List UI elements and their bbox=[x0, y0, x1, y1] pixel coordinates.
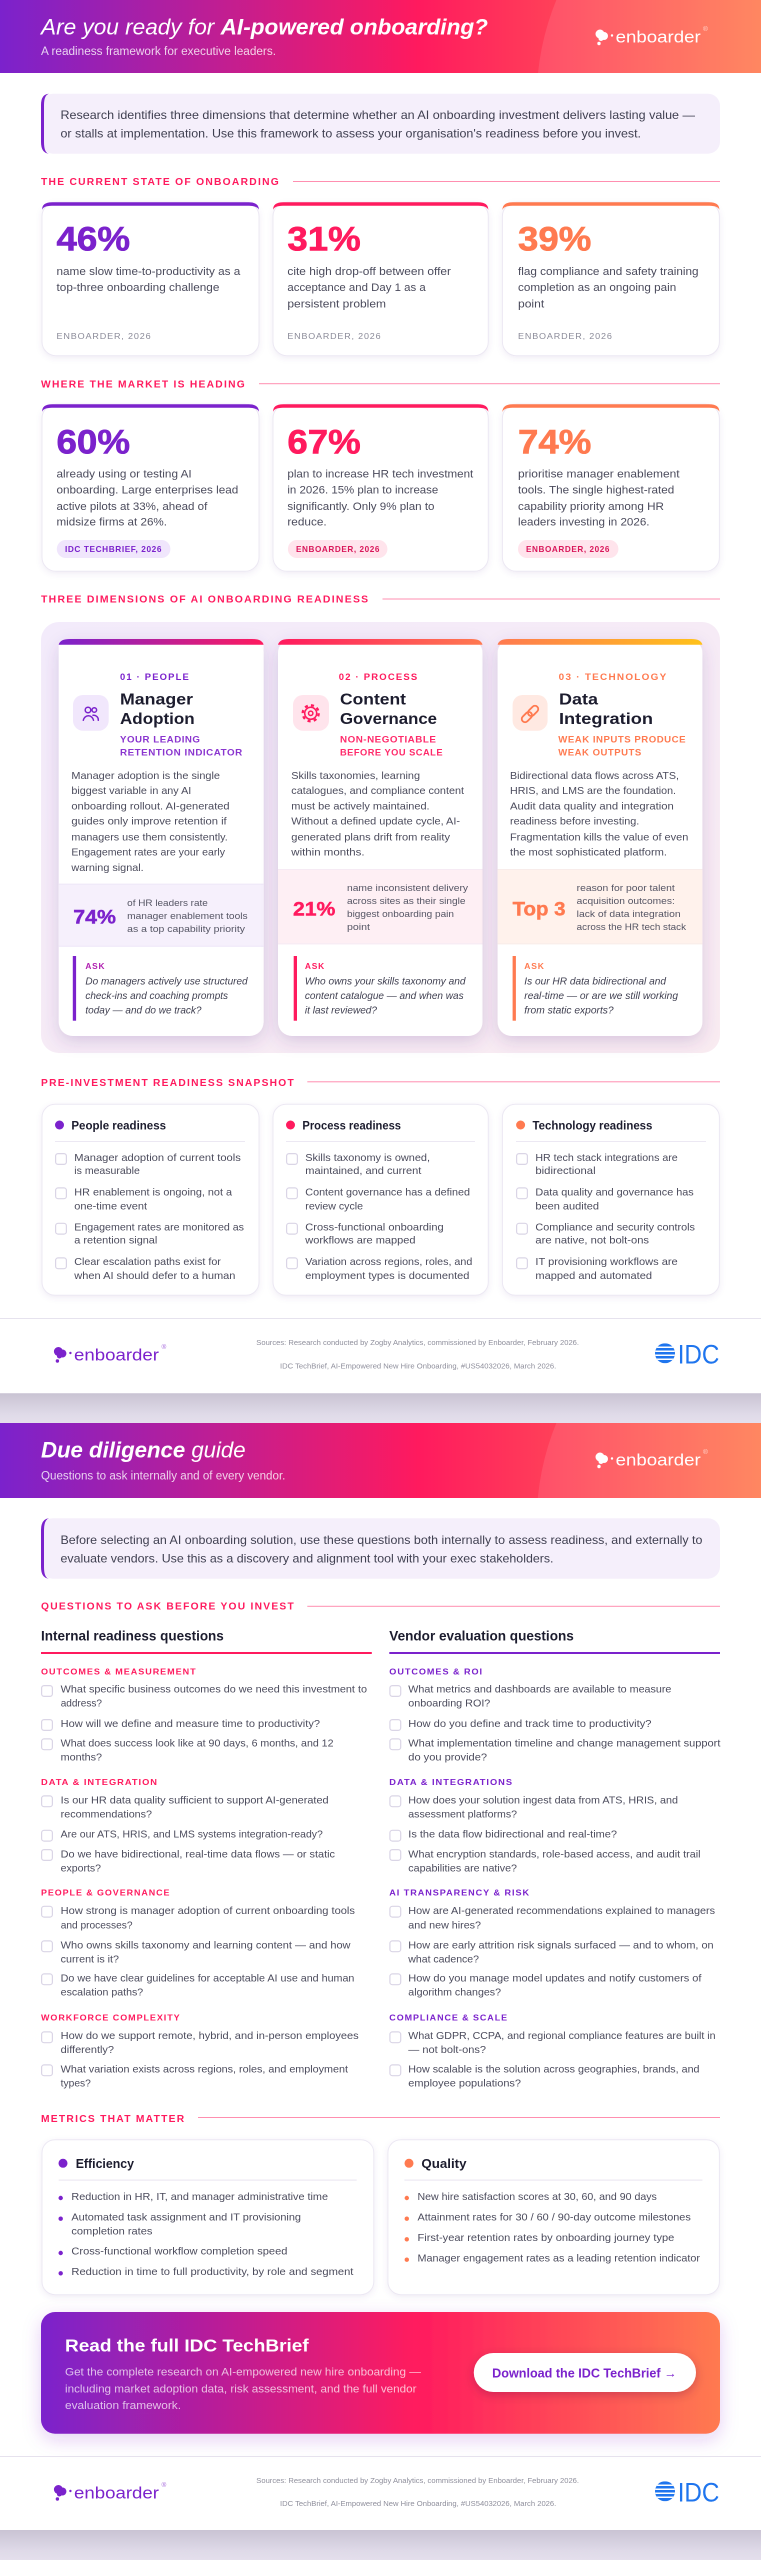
checklist card: technology readiness: bidirectional bbox=[535, 1166, 596, 1177]
group: AI transparency and risk: AI TRANSPARENCY & RISK bbox=[389, 1888, 530, 1898]
stat card: 60%: active pilots at 33%, ahead of bbox=[56, 501, 207, 513]
group: data and integrations: capabilities are native? bbox=[408, 1863, 517, 1874]
stat card: 31%: persistent problem bbox=[287, 298, 386, 310]
stat card: 39%: point bbox=[518, 298, 544, 310]
stat card: 39%: completion as an ongoing pain bbox=[518, 282, 676, 294]
group: outcomes and ROI: OUTCOMES & ROI bbox=[389, 1666, 483, 1676]
card: technology: Data bbox=[559, 692, 598, 708]
stat card: 60%: already using or testing AI bbox=[56, 468, 192, 480]
group: AI transparency and risk: what cadence? bbox=[407, 1954, 479, 1965]
metrics card: efficiency: Efficiency bbox=[76, 2157, 134, 2171]
logo: enboarder white: ® bbox=[703, 1448, 708, 1456]
group: data and integrations: What encryption standards, role-based access, and audit trail bbox=[408, 1849, 700, 1860]
group: outcomes and measurement: OUTCOMES & MEASUREMENT bbox=[41, 1666, 197, 1676]
metrics card: quality: Attainment rates for 30 / 60 / 90-day outcome milestones bbox=[418, 2212, 691, 2223]
body text: catalogues, and compliance content bbox=[291, 786, 464, 797]
checklist card: people readiness: People readiness bbox=[71, 1120, 166, 1132]
stat card: 67%: reduce. bbox=[287, 516, 327, 528]
group: people and governance: and processes? bbox=[61, 1921, 133, 1932]
stat card: 67%: significantly. Only 9% plan to bbox=[287, 501, 435, 513]
body text: HRIS, and LMS are the foundation. bbox=[510, 786, 676, 797]
group: data and integrations: assessment platforms? bbox=[408, 1809, 517, 1820]
button: Download the IDC TechBrief → bbox=[492, 2366, 677, 2380]
sources bbox=[256, 2476, 579, 2508]
stat card: 74%: leaders investing in 2026. bbox=[518, 516, 650, 528]
body text: guides only improve retention if bbox=[71, 816, 227, 827]
checklist card: technology readiness: are native, not bolt-ons bbox=[535, 1236, 649, 1247]
group: people and governance: How strong is manager adoption of current onboarding tools bbox=[61, 1906, 355, 1917]
metrics card: efficiency: Automated task assignment and IT provisioning bbox=[71, 2212, 301, 2223]
group: outcomes and measurement: address? bbox=[61, 1699, 102, 1710]
card: people: Adoption bbox=[120, 711, 195, 728]
sources: IDC TechBrief, AI-Empowered New Hire Onboarding, #US54032026, March 2026. bbox=[280, 2499, 556, 2508]
checklist card: technology readiness: IT provisioning workflows are bbox=[535, 1257, 678, 1268]
checklist card: technology readiness: Technology readiness bbox=[532, 1120, 652, 1132]
group: data and integration bbox=[41, 1777, 335, 1874]
intro callout: due diligence: Before selecting an AI onboarding solution, use these questions both internally to assess readiness, and externally to bbox=[60, 1533, 703, 1547]
group: workforce complexity: differently? bbox=[61, 2045, 114, 2056]
stat card: 60%: 60% bbox=[56, 423, 130, 461]
section heading: three dimensions: THREE DIMENSIONS OF AI ONBOARDING READINESS bbox=[41, 593, 369, 605]
checklist card: people readiness bbox=[42, 1104, 259, 1295]
header: page 2 bbox=[0, 1423, 761, 1498]
logo: enboarder purple bbox=[54, 1343, 166, 1365]
card: process: NON-NEGOTIABLE bbox=[340, 734, 436, 745]
group: outcomes and ROI: What implementation timeline and change management support bbox=[408, 1739, 721, 1750]
intro callout: Research identifies three dimensions that determine whether an AI onboarding investment delivers lasting value — bbox=[60, 108, 695, 122]
stat band: 21% bbox=[278, 869, 482, 944]
gap shadow between pages bbox=[0, 1393, 761, 1423]
stat band: Top 3: across the HR tech stack bbox=[577, 922, 686, 932]
logo: IDC bbox=[655, 1343, 718, 1364]
checklist card: people readiness: a retention signal bbox=[74, 1236, 157, 1247]
call to action banner bbox=[41, 2312, 720, 2434]
stat band: 21%: point bbox=[347, 922, 370, 932]
column: internal readiness questions: Internal readiness questions bbox=[41, 1629, 224, 1644]
logo: enboarder white bbox=[596, 25, 708, 47]
metrics card: quality: First-year retention rates by onboarding journey type bbox=[418, 2233, 675, 2244]
logo: enboarder white: ® bbox=[703, 25, 708, 33]
stat band: 21%: 21% bbox=[293, 899, 336, 920]
ask question: Who owns your skills taxonomy and bbox=[305, 977, 466, 988]
call to action banner: including market adoption data, risk assessment, and the full vendor bbox=[65, 2383, 417, 2395]
bottom shadow bbox=[0, 2530, 761, 2560]
stat band: 74%: manager enablement tools bbox=[127, 911, 248, 921]
card: people: 01 · PEOPLE bbox=[120, 672, 190, 683]
stat card: 74%: capability priority among HR bbox=[518, 501, 664, 513]
group: outcomes and ROI bbox=[389, 1666, 721, 1764]
stat card: 67%: plan to increase HR tech investment bbox=[287, 468, 473, 480]
metrics card: efficiency: Reduction in HR, IT, and manager administrative time bbox=[71, 2192, 328, 2203]
card: process: BEFORE YOU SCALE bbox=[340, 748, 443, 759]
body text: Bidirectional data flows across ATS, bbox=[510, 771, 679, 782]
group: compliance and scale: COMPLIANCE & SCALE bbox=[389, 2013, 508, 2023]
logo: enboarder purple: ® bbox=[162, 1343, 166, 1351]
checklist card: process readiness: Process readiness bbox=[302, 1120, 401, 1132]
stat band: Top 3 bbox=[498, 869, 702, 944]
card: technology: Integration bbox=[559, 711, 653, 728]
body text bbox=[70, 771, 230, 874]
section heading: metrics: METRICS THAT MATTER bbox=[41, 2113, 185, 2125]
group: workforce complexity: WORKFORCE COMPLEXITY bbox=[41, 2013, 181, 2023]
footer: page 2 bbox=[0, 2456, 761, 2508]
group: outcomes and measurement: months? bbox=[61, 1753, 102, 1764]
call to action banner: Read the full IDC TechBrief bbox=[65, 2336, 309, 2356]
section heading: current state: THE CURRENT STATE OF ONBOARDING bbox=[41, 176, 280, 188]
ask question: it last reviewed? bbox=[305, 1005, 377, 1016]
metrics card: quality: Manager engagement rates as a leading retention indicator bbox=[418, 2253, 701, 2264]
ask question: content catalogue — and when was bbox=[305, 991, 464, 1002]
icon: link bbox=[513, 695, 548, 731]
logo: enboarder purple: enboarder bbox=[74, 2484, 160, 2502]
stat card: 39%: ENBOARDER, 2026 bbox=[518, 331, 613, 341]
stat card: 46%: name slow time-to-productivity as a bbox=[56, 266, 240, 278]
sources: IDC TechBrief, AI-Empowered New Hire Onboarding, #US54032026, March 2026. bbox=[280, 1361, 556, 1370]
ask question: ASK bbox=[524, 961, 545, 971]
card: process: 02 · PROCESS bbox=[339, 672, 418, 683]
column: internal readiness questions bbox=[41, 1629, 372, 2090]
stat band: Top 3: acquisition outcomes: bbox=[577, 896, 675, 906]
body text: generated plans drift from reality bbox=[291, 832, 451, 843]
sources bbox=[256, 1338, 579, 1370]
body text: must be actively maintained. bbox=[291, 802, 430, 813]
group: outcomes and measurement bbox=[41, 1666, 367, 1764]
ask question bbox=[513, 956, 678, 1021]
group: data and integration: Are our ATS, HRIS, and LMS systems integration-ready? bbox=[61, 1830, 323, 1841]
intro callout: due diligence: evaluate vendors. Use this as a discovery and alignment tool with your exec stakeholders. bbox=[60, 1551, 554, 1565]
stat card: 60%: midsize firms at 26%. bbox=[56, 516, 167, 528]
stat card: 46%: top-three onboarding challenge bbox=[56, 282, 220, 294]
card: people: RETENTION INDICATOR bbox=[120, 748, 243, 759]
checklist card: technology readiness bbox=[502, 1104, 719, 1295]
ask question: Is our HR data bidirectional and bbox=[524, 977, 666, 988]
group: data and integrations: DATA & INTEGRATIONS bbox=[389, 1777, 513, 1787]
icon: gear bbox=[293, 695, 329, 731]
group: AI transparency and risk: How are early attrition risk signals surfaced — and to whom, on bbox=[408, 1940, 714, 1951]
group: data and integration: DATA & INTEGRATION bbox=[41, 1777, 158, 1787]
ask question: ASK bbox=[85, 961, 105, 971]
logo: IDC bbox=[655, 2481, 718, 2502]
ask question: check-ins and coaching prompts bbox=[85, 991, 228, 1002]
group: outcomes and ROI: What metrics and dashboards are available to measure bbox=[408, 1685, 672, 1696]
checklist card: people readiness: Engagement rates are monitored as bbox=[74, 1223, 244, 1234]
metrics card: efficiency: completion rates bbox=[71, 2226, 152, 2237]
stat band: 74%: as a top capability priority bbox=[127, 924, 245, 934]
group: outcomes and measurement: How will we define and measure time to productivity? bbox=[61, 1719, 320, 1730]
stat card: 31% bbox=[273, 202, 488, 356]
stat card: 67%: in 2026. 15% plan to increase bbox=[287, 484, 438, 496]
group: people and governance bbox=[41, 1888, 355, 1999]
section heading: market: WHERE THE MARKET IS HEADING bbox=[41, 378, 246, 390]
sources: Sources: Research conducted by Zogby Analytics, commissioned by Enboarder, February 2026. bbox=[256, 1338, 579, 1347]
intro callout: or stalls at implementation. Use this framework to assess your organisation's readiness before you invest. bbox=[60, 126, 641, 140]
stat card: 74%: tools. The single highest-rated bbox=[518, 484, 674, 496]
body text: managers use them consistently. bbox=[71, 832, 228, 843]
stat card: 39%: flag compliance and safety training bbox=[518, 266, 699, 278]
stat card: 46% bbox=[42, 202, 259, 356]
header: page 1 bbox=[0, 0, 761, 73]
card: technology bbox=[498, 639, 702, 1036]
checklist card: process readiness: maintained, and current bbox=[305, 1166, 422, 1177]
ask question: real-time — or are we still working bbox=[524, 991, 678, 1002]
group: AI transparency and risk: How do you manage model updates and notify customers of bbox=[408, 1974, 702, 1985]
body text bbox=[290, 771, 464, 858]
group: compliance and scale bbox=[389, 2013, 716, 2090]
stat card: 39% bbox=[502, 202, 719, 356]
checklist card: technology readiness: Compliance and security controls bbox=[535, 1223, 695, 1234]
body text: onboarding rollout. AI-generated bbox=[71, 802, 230, 813]
logo: enboarder purple: enboarder bbox=[74, 1347, 160, 1365]
checklist card: process readiness: employment types is documented bbox=[305, 1271, 470, 1282]
sources: Sources: Research conducted by Zogby Analytics, commissioned by Enboarder, February 2026. bbox=[256, 2476, 579, 2485]
intro callout: due diligence bbox=[41, 1518, 720, 1579]
call to action banner: evaluation framework. bbox=[65, 2400, 181, 2412]
body text: warning signal. bbox=[70, 863, 144, 874]
stat card: 31%: acceptance and Day 1 as a bbox=[287, 282, 426, 294]
card: process: Content bbox=[340, 692, 407, 708]
metrics card: quality bbox=[388, 2140, 719, 2295]
title: Due diligence guide bbox=[41, 1438, 246, 1463]
metrics card: efficiency: Reduction in time to full productivity, by role and segment bbox=[71, 2267, 354, 2278]
metrics card: efficiency bbox=[42, 2140, 374, 2295]
checklist card: people readiness: is measurable bbox=[74, 1166, 140, 1177]
stat card: 74% bbox=[502, 404, 719, 571]
group: people and governance: Who owns skills taxonomy and learning content — and how bbox=[61, 1940, 351, 1951]
title: Are you ready for AI-powered onboarding? bbox=[39, 14, 488, 40]
stat band: Top 3: Top 3 bbox=[513, 899, 566, 920]
group: AI transparency and risk: How are AI-generated recommendations explained to managers bbox=[408, 1906, 715, 1917]
checklist card: people readiness: one-time event bbox=[74, 1201, 147, 1212]
group: workforce complexity: types? bbox=[61, 2079, 91, 2090]
logo: enboarder purple bbox=[54, 2481, 166, 2502]
body text: Audit data quality and integration bbox=[510, 802, 674, 813]
group: workforce complexity bbox=[41, 2013, 359, 2090]
ask question: ASK bbox=[305, 961, 325, 971]
group: people and governance: current is it? bbox=[61, 1954, 119, 1965]
card: people: YOUR LEADING bbox=[120, 734, 200, 745]
checklist card: process readiness bbox=[273, 1104, 488, 1295]
stat card: 60% bbox=[42, 404, 259, 571]
ask question: from static exports? bbox=[524, 1005, 614, 1016]
body text: readiness before investing. bbox=[510, 816, 639, 827]
source pill: ENBOARDER, 2026 bbox=[526, 544, 610, 554]
body text: Fragmentation kills the value of even bbox=[510, 832, 688, 843]
logo: enboarder white bbox=[596, 1448, 708, 1470]
source pill: ENBOARDER, 2026 bbox=[296, 544, 380, 554]
card: technology: 03 · TECHNOLOGY bbox=[559, 672, 668, 683]
card: people: Manager bbox=[120, 692, 193, 708]
stat band: 21%: name inconsistent delivery bbox=[347, 883, 468, 893]
stat card: 31%: 31% bbox=[287, 221, 361, 259]
stat card: 39%: 39% bbox=[518, 221, 591, 259]
checklist card: process readiness: Cross-functional onboarding bbox=[305, 1223, 444, 1234]
ask question: today — and do we track? bbox=[85, 1005, 202, 1016]
group: outcomes and measurement: What does success look like at 90 days, 6 months, and 12 bbox=[61, 1739, 334, 1750]
body text: Without a defined update cycle, AI- bbox=[291, 816, 460, 827]
section heading: snapshot: PRE-INVESTMENT READINESS SNAPSHOT bbox=[41, 1077, 295, 1089]
stat card: 46%: ENBOARDER, 2026 bbox=[56, 331, 152, 341]
group: outcomes and measurement: What specific business outcomes do we need this investment to bbox=[61, 1685, 367, 1696]
body text bbox=[510, 771, 688, 858]
footer: page 1 bbox=[0, 1318, 761, 1370]
card: technology: WEAK OUTPUTS bbox=[558, 748, 642, 759]
logo: IDC: IDC bbox=[678, 1340, 719, 1370]
source pill bbox=[57, 540, 170, 558]
body text: Engagement rates are your early bbox=[71, 847, 226, 858]
checklist card: process readiness: Variation across regions, roles, and bbox=[305, 1257, 473, 1268]
call to action banner: Get the complete research on AI-empowered new hire onboarding — bbox=[65, 2367, 421, 2379]
stat card: 31%: cite high drop-off between offer bbox=[287, 266, 452, 278]
column: vendor evaluation questions: Vendor evaluation questions bbox=[389, 1629, 574, 1644]
group: data and integrations: Is the data flow bidirectional and real-time? bbox=[408, 1830, 617, 1841]
group: AI transparency and risk: and new hires? bbox=[408, 1921, 481, 1932]
group: outcomes and ROI: How do you define and track time to productivity? bbox=[408, 1719, 652, 1730]
checklist card: people readiness: Clear escalation paths exist for bbox=[74, 1257, 222, 1268]
stat band: 74%: of HR leaders rate bbox=[127, 898, 208, 908]
checklist card: process readiness: Skills taxonomy is owned, bbox=[305, 1153, 430, 1164]
group: compliance and scale: — not bolt-ons? bbox=[408, 2045, 486, 2056]
group: people and governance: escalation paths? bbox=[61, 1988, 144, 1999]
group: data and integrations bbox=[389, 1777, 700, 1874]
group: people and governance: PEOPLE & GOVERNANCE bbox=[41, 1888, 170, 1898]
group: data and integration: exports? bbox=[61, 1863, 101, 1874]
stat band: Top 3: reason for poor talent bbox=[577, 883, 675, 893]
button bbox=[474, 2353, 696, 2392]
card: technology: WEAK INPUTS PRODUCE bbox=[558, 734, 686, 745]
ask question bbox=[294, 956, 466, 1021]
group: compliance and scale: What GDPR, CCPA, and regional compliance features are built in bbox=[408, 2031, 716, 2042]
source pill: IDC TECHBRIEF, 2026 bbox=[65, 544, 162, 554]
checklist card: technology readiness: HR tech stack integrations are bbox=[535, 1153, 678, 1164]
page 1 sheet bbox=[0, 0, 761, 1393]
stat card: 67%: 67% bbox=[287, 423, 361, 461]
checklist card: process readiness: Content governance has a defined bbox=[305, 1188, 470, 1199]
column: vendor evaluation questions bbox=[389, 1629, 721, 2090]
group: data and integration: recommendations? bbox=[61, 1809, 152, 1820]
body text: biggest variable in any AI bbox=[71, 786, 191, 797]
stat card: 31%: ENBOARDER, 2026 bbox=[287, 331, 381, 341]
checklist card: people readiness: HR enablement is ongoing, not a bbox=[74, 1188, 232, 1199]
ask question: Do managers actively use structured bbox=[85, 977, 248, 988]
stat card: 74%: 74% bbox=[518, 423, 591, 461]
group: data and integrations: How does your solution ingest data from ATS, HRIS, and bbox=[408, 1795, 678, 1806]
stat band: 74% bbox=[59, 884, 264, 947]
card: people bbox=[59, 639, 264, 1036]
body text: Skills taxonomies, learning bbox=[291, 771, 420, 782]
panel: three dimensions bbox=[41, 622, 720, 1053]
card: process bbox=[278, 639, 482, 1036]
group: workforce complexity: What variation exists across regions, roles, and employment bbox=[61, 2065, 348, 2076]
section heading: questions: QUESTIONS TO ASK BEFORE YOU INVEST bbox=[41, 1601, 295, 1613]
body text: Manager adoption is the single bbox=[71, 771, 220, 782]
checklist card: process readiness: review cycle bbox=[305, 1201, 363, 1212]
group: data and integration: Is our HR data quality sufficient to support AI-generated bbox=[61, 1795, 329, 1806]
stat band: 74%: 74% bbox=[73, 907, 116, 928]
stat card: 60%: onboarding. Large enterprises lead bbox=[56, 484, 238, 496]
group: outcomes and ROI: onboarding ROI? bbox=[408, 1699, 491, 1710]
checklist card: people readiness: Manager adoption of current tools bbox=[74, 1153, 241, 1164]
stat band: 21%: biggest onboarding pain bbox=[347, 909, 454, 919]
logo: enboarder purple: ® bbox=[162, 2481, 166, 2489]
checklist card: technology readiness: been audited bbox=[535, 1201, 599, 1212]
stat card: 46%: 46% bbox=[56, 221, 130, 259]
intro callout bbox=[41, 94, 720, 154]
metrics card: efficiency: Cross-functional workflow completion speed bbox=[71, 2247, 288, 2258]
group: workforce complexity: How do we support remote, hybrid, and in-person employees bbox=[61, 2031, 359, 2042]
stat card: 74%: prioritise manager enablement bbox=[518, 468, 680, 480]
group: compliance and scale: How scalable is the solution across geographies, brands, and bbox=[408, 2065, 700, 2076]
group: AI transparency and risk bbox=[389, 1888, 715, 1999]
stat card: 67% bbox=[273, 404, 488, 571]
checklist card: technology readiness: mapped and automated bbox=[535, 1271, 652, 1282]
logo: enboarder white: enboarder bbox=[616, 1452, 701, 1470]
checklist card: technology readiness: Data quality and governance has bbox=[535, 1188, 694, 1199]
ask question bbox=[73, 956, 248, 1021]
metrics card: quality: Quality bbox=[421, 2157, 467, 2171]
subtitle: A readiness framework for executive leaders. bbox=[41, 46, 276, 58]
source pill bbox=[518, 540, 618, 558]
body text: within months. bbox=[290, 847, 365, 858]
group: people and governance: Do we have clear guidelines for acceptable AI use and human bbox=[61, 1974, 354, 1985]
group: data and integration: Do we have bidirectional, real-time data flows — or static bbox=[61, 1849, 335, 1860]
stat band: 21%: across sites as their single bbox=[347, 896, 466, 906]
stat band: Top 3: lack of data integration bbox=[577, 909, 681, 919]
checklist card: people readiness: when AI should defer to a human bbox=[73, 1271, 235, 1282]
page 2 sheet bbox=[0, 1423, 761, 2530]
group: AI transparency and risk: algorithm changes? bbox=[408, 1988, 501, 1999]
body text: the most sophisticated platform. bbox=[510, 847, 667, 858]
group: outcomes and ROI: do you provide? bbox=[408, 1753, 487, 1764]
metrics card: quality: New hire satisfaction scores at 30, 60, and 90 days bbox=[418, 2192, 657, 2203]
icon: people bbox=[73, 695, 109, 731]
logo: enboarder white: enboarder bbox=[616, 29, 701, 47]
card: process: Governance bbox=[340, 711, 437, 728]
subtitle: Questions to ask internally and of every vendor. bbox=[41, 1470, 285, 1482]
group: compliance and scale: employee populations? bbox=[408, 2079, 521, 2090]
source pill bbox=[288, 540, 387, 558]
logo: IDC: IDC bbox=[678, 2478, 719, 2508]
checklist card: process readiness: workflows are mapped bbox=[304, 1236, 416, 1247]
